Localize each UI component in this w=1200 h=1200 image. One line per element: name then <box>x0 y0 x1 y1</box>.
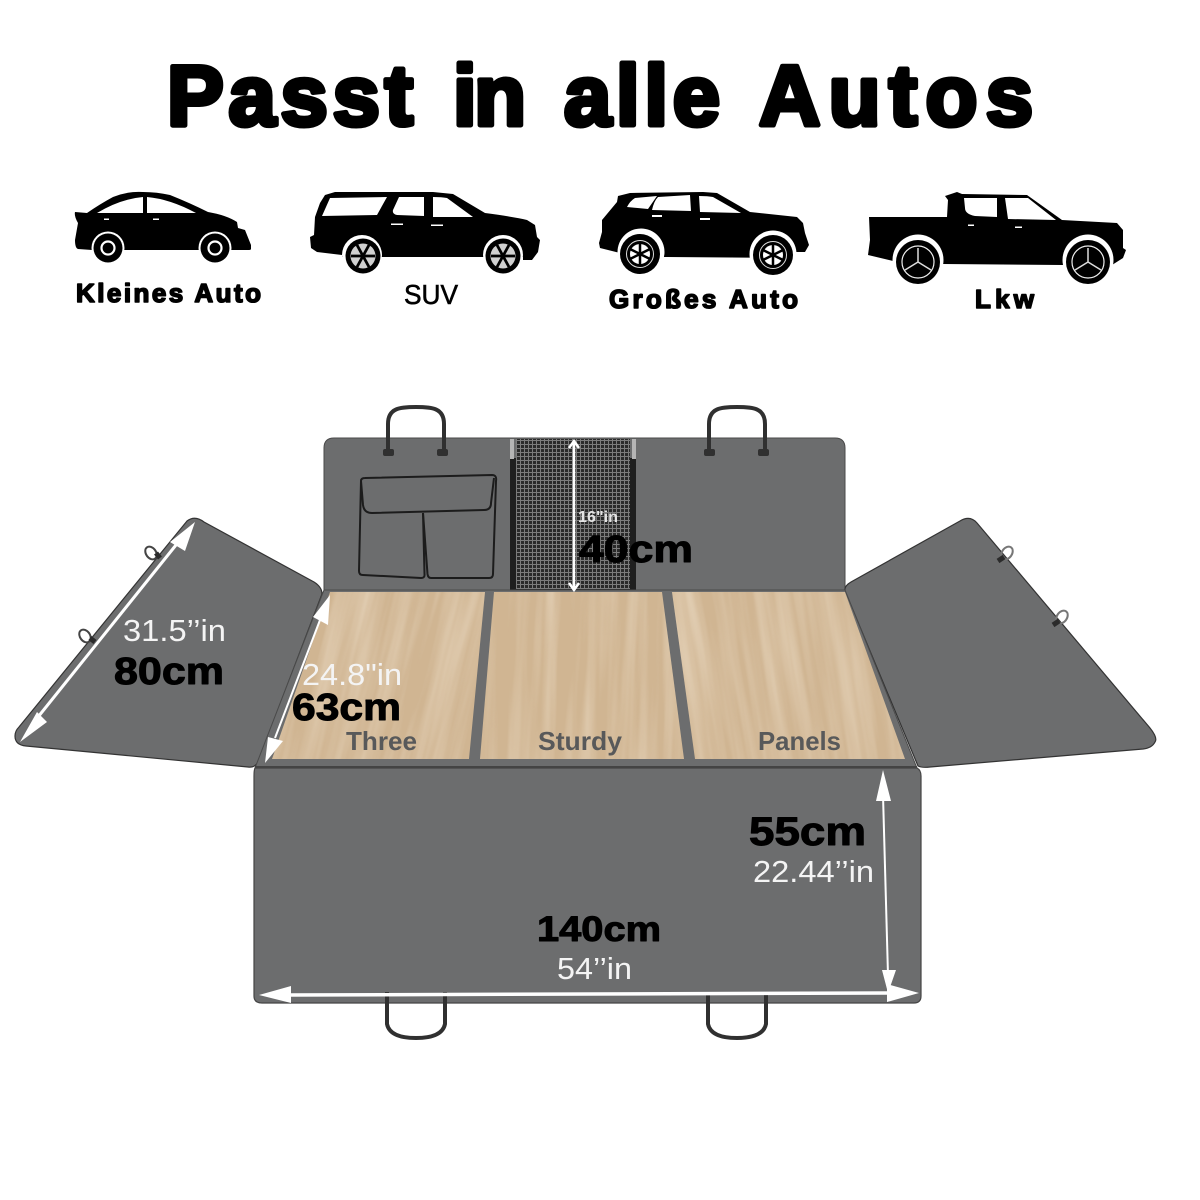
text: 16 inch: 16"in <box>578 509 618 526</box>
arrow: seat depth <box>265 595 330 763</box>
title: Autos <box>759 49 1033 144</box>
text: 24.8 inch: 24.8"in <box>302 657 402 692</box>
panel label: Three: Three <box>346 726 417 756</box>
arrow: mesh height <box>569 441 579 590</box>
title <box>167 49 1033 144</box>
three wood panels <box>272 592 905 759</box>
dimension: side flap <box>20 522 226 742</box>
label: Kleines Auto: Kleines Auto <box>76 278 261 308</box>
label: Großes Auto: Großes Auto <box>609 284 798 314</box>
text: 54 inch: 54’’in <box>557 951 632 986</box>
right flap rings <box>998 544 1070 626</box>
label: Lkw: Lkw <box>975 284 1035 314</box>
title: in <box>453 49 526 144</box>
text: 55cm: 55cm <box>749 810 866 854</box>
dimension: total width <box>259 910 919 1003</box>
panel label: Sturdy: Sturdy <box>538 726 623 756</box>
right side flap <box>845 518 1156 767</box>
storage pockets <box>359 475 496 578</box>
text: 31.5 inch: 31.5’’in <box>123 613 226 648</box>
title: Passt <box>167 49 413 144</box>
dimension: seat depth <box>265 595 402 763</box>
dimension: front panel height <box>749 770 896 993</box>
mesh pocket <box>510 439 636 590</box>
seat cover diagram <box>15 407 1156 1038</box>
icon: pickup truck <box>868 192 1126 286</box>
seat base <box>254 590 918 768</box>
label: SUV: SUV <box>404 279 458 310</box>
front panel <box>254 767 921 1003</box>
icon: large car <box>599 192 809 278</box>
dimension: back panel height <box>569 441 693 590</box>
left side flap <box>15 518 322 767</box>
headrest straps <box>383 407 769 456</box>
icon: SUV <box>310 192 540 275</box>
text: 22.44 inch: 22.44’’in <box>753 854 874 889</box>
text: 63cm: 63cm <box>292 687 401 729</box>
left flap rings <box>77 544 160 645</box>
text: 80cm: 80cm <box>114 651 224 693</box>
text: 40cm: 40cm <box>579 529 693 571</box>
arrow: front height <box>876 770 896 993</box>
icon: small car <box>75 192 251 264</box>
bottom straps <box>387 992 766 1038</box>
title: alle <box>564 49 720 144</box>
arrow: total width <box>259 984 919 1003</box>
text: 140cm: 140cm <box>537 910 661 949</box>
panel label: Panels: Panels <box>758 726 841 756</box>
vehicle row <box>75 192 1126 314</box>
back panel <box>324 438 845 590</box>
arrow: flap length <box>20 522 195 742</box>
